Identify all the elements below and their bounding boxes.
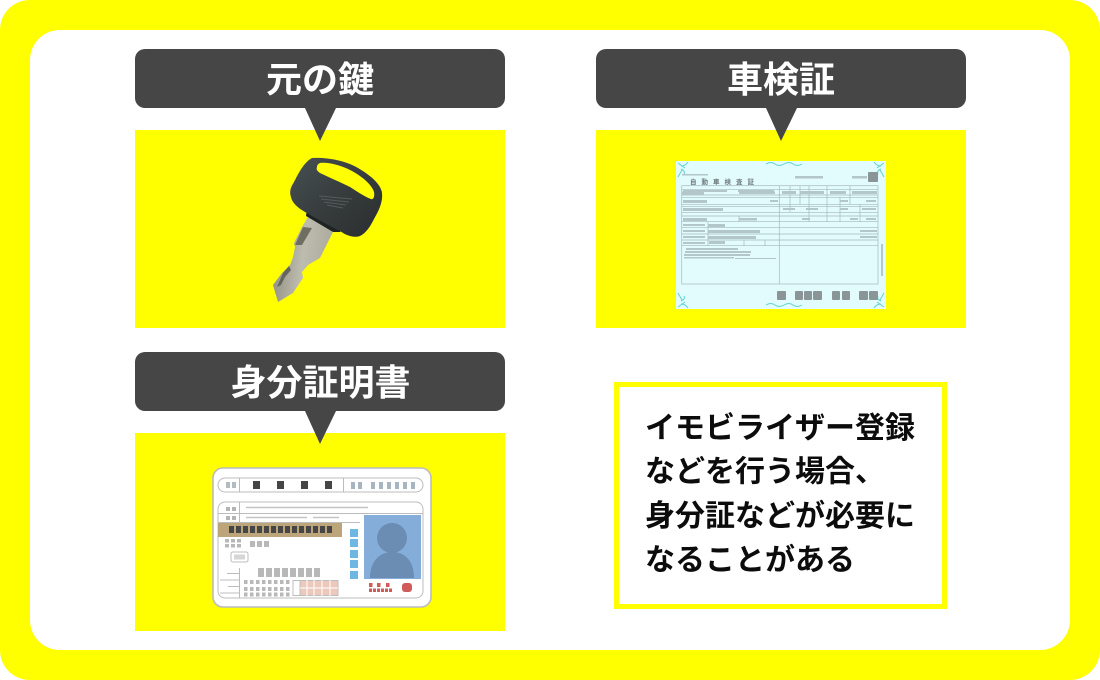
icon: key: [273, 158, 382, 302]
callout text: などを行う場合、: [645, 456, 885, 488]
icon: certificate document: [676, 161, 886, 309]
heading: original key: 元の鍵: [266, 59, 374, 100]
ID card header row: [218, 478, 423, 492]
ID card photo: [364, 515, 421, 579]
heading: ID document: 身分証明書: [230, 362, 411, 403]
ID card small chip: [231, 552, 248, 562]
icon: ID card: [213, 468, 431, 607]
ID card pink grid: [293, 580, 338, 596]
ID card small square grid: [244, 580, 290, 596]
key logo: [319, 196, 352, 208]
certificate form lines: [682, 186, 878, 284]
ID card blue checkboxes: [350, 529, 358, 579]
callout text: イモビライザー登録: [645, 412, 915, 445]
panel: ID document: [135, 352, 505, 631]
certificate title: 自動車検査証: [690, 176, 759, 186]
key collar: [306, 208, 342, 232]
panel: vehicle inspection certificate: [596, 49, 966, 328]
callout text: なることがある: [645, 543, 855, 577]
heading: ID document: [135, 352, 505, 444]
panel: original key: [135, 49, 505, 328]
ID card number band: [218, 523, 342, 537]
heading: original key: [135, 49, 505, 141]
ID card body frame: [218, 502, 423, 598]
heading: vehicle inspection certificate: [596, 49, 966, 141]
ID card grey details: [225, 539, 320, 577]
heading: vehicle inspection certificate: 車検証: [727, 59, 835, 100]
key hole: [317, 163, 374, 199]
key blade: [273, 217, 333, 302]
callout text: [645, 412, 915, 577]
callout: note: [616, 384, 944, 606]
callout text: 身分証などが必要に: [645, 499, 915, 533]
ID card red seal: [369, 583, 412, 592]
key grip: [290, 158, 382, 237]
certificate stamps: [777, 172, 878, 300]
certificate placeholder text: [682, 174, 883, 276]
certificate ornaments: [678, 162, 884, 308]
